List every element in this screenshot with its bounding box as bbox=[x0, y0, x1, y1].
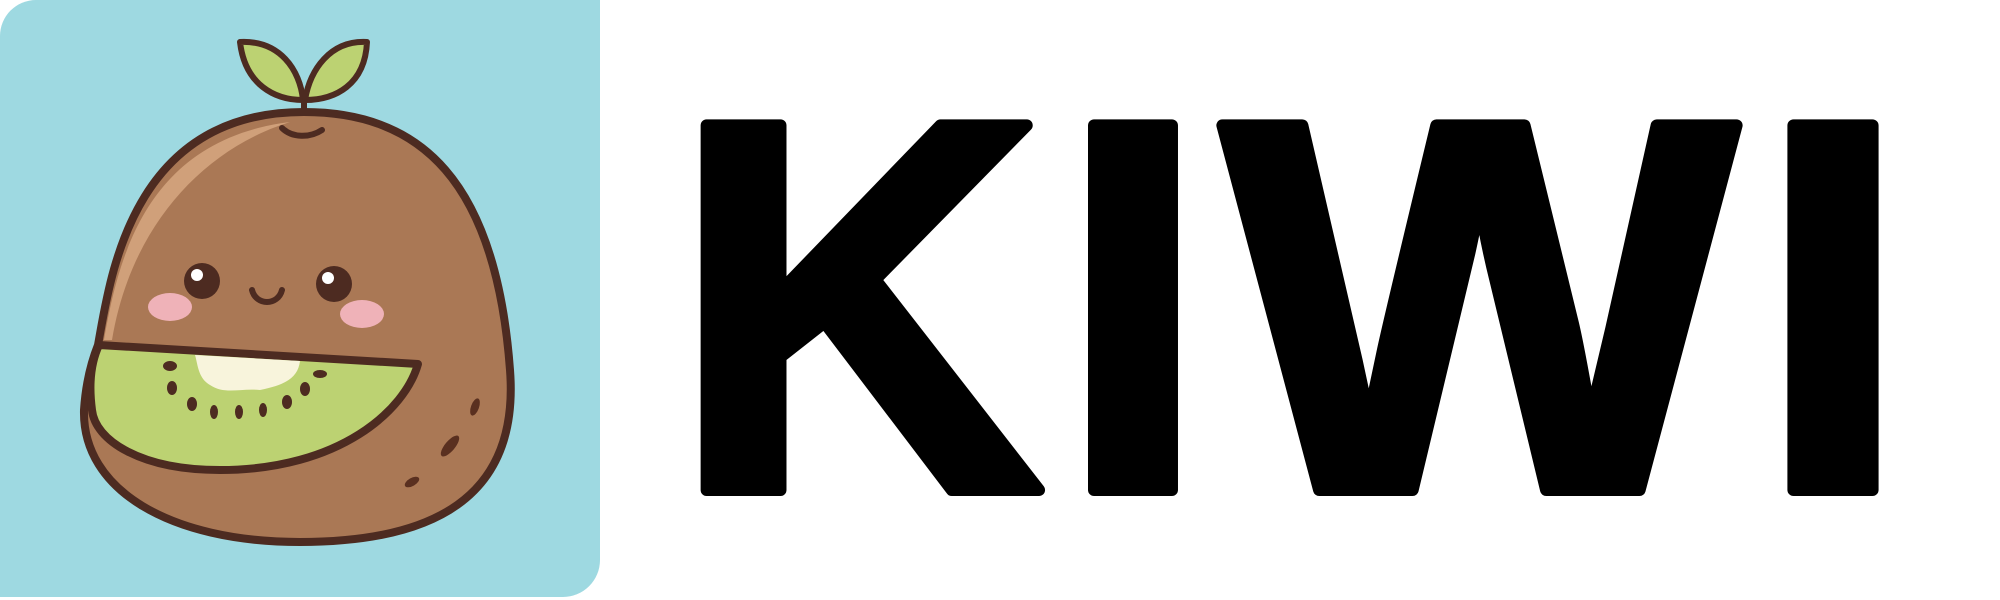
icon: spots bbox=[403, 397, 482, 489]
title: KIWI: K bbox=[672, 11, 1044, 600]
icon: kiwi body bbox=[84, 112, 511, 542]
panel: kiwi illustration background bbox=[0, 0, 600, 597]
title: KIWI: I bbox=[1757, 11, 1909, 600]
title: KIWI: I bbox=[1058, 11, 1208, 600]
icon: navel bbox=[282, 128, 322, 136]
icon: kiwi slice bbox=[90, 345, 418, 470]
icon: kiwi leaves bbox=[240, 42, 367, 122]
icon: mouth bbox=[252, 290, 282, 302]
icon: cheeks bbox=[148, 293, 384, 328]
title: KIWI: W bbox=[1222, 11, 1742, 600]
title: KIWI bbox=[672, 11, 1909, 600]
icon: eyes bbox=[184, 263, 352, 302]
